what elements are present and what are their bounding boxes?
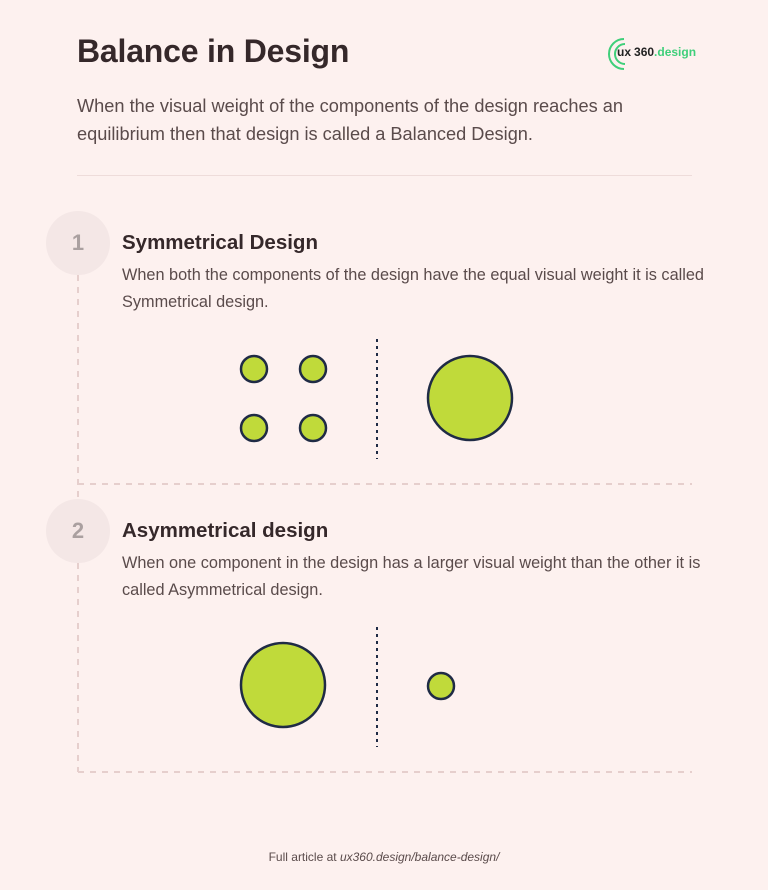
description: When one component in the design has a larger visual weight than the other it is xyxy=(122,554,700,572)
number badge 2 xyxy=(46,499,110,563)
diagram: symmetrical xyxy=(240,339,514,459)
intro text: equilibrium then that design is called a Balanced Design. xyxy=(77,124,533,144)
description: When both the components of the design have the equal visual weight it is called xyxy=(122,266,704,284)
heading: asymmetrical: Asymmetrical design xyxy=(122,519,328,542)
logo: ux360.design xyxy=(617,45,696,59)
number badge 1: 1 xyxy=(72,230,84,255)
footer: Full article at ux360.design/balance-design/ xyxy=(269,850,499,864)
heading: symmetrical: Symmetrical Design xyxy=(122,231,318,254)
panel: asymmetrical xyxy=(46,499,700,599)
diagram: asymmetrical xyxy=(240,627,456,747)
number badge 1 xyxy=(46,211,110,275)
intro text: When the visual weight of the components of the design reaches an xyxy=(77,96,623,116)
description xyxy=(122,554,700,599)
panel: symmetrical xyxy=(46,211,704,311)
intro text xyxy=(77,96,623,144)
number badge 2: 2 xyxy=(72,518,84,543)
logo xyxy=(608,38,696,70)
description xyxy=(122,266,704,311)
title: Balance in Design xyxy=(77,33,349,69)
description: Symmetrical design. xyxy=(122,293,269,311)
description: called Asymmetrical design. xyxy=(122,581,323,599)
